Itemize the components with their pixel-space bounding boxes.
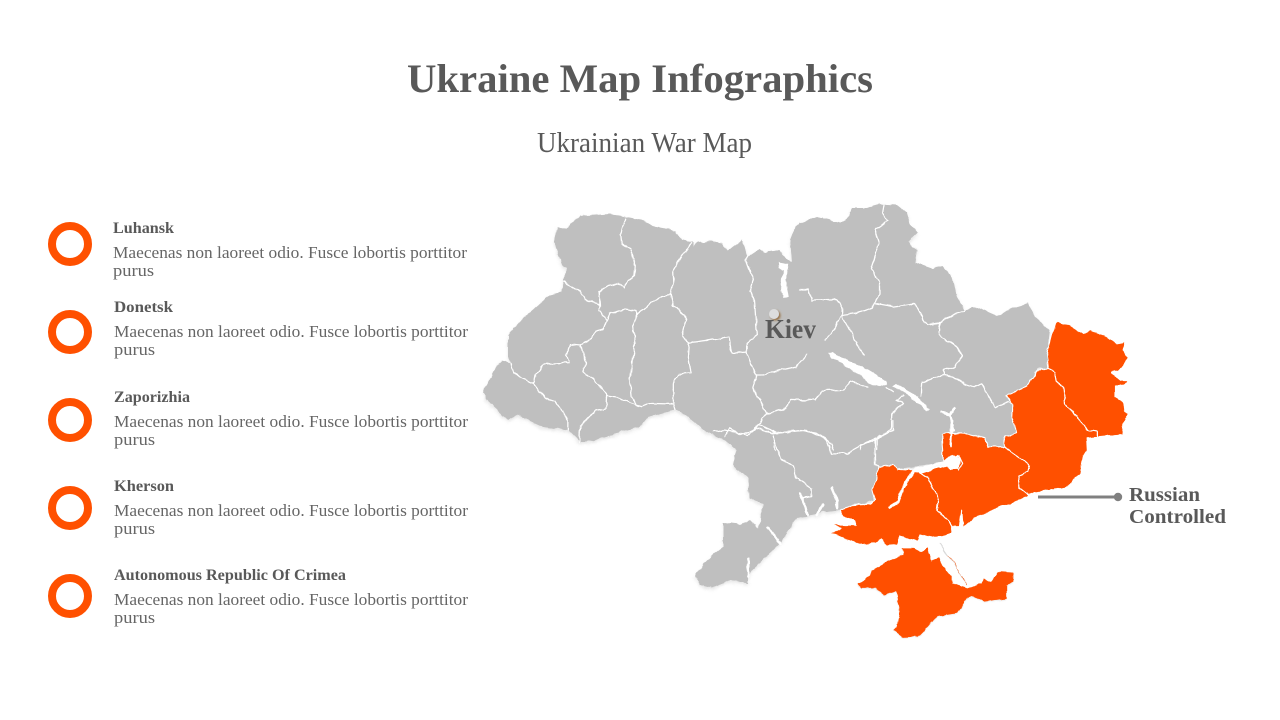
list item: Luhansk: Maecenas non laoreet odio. Fusce lobortis porttitor bbox=[113, 243, 468, 262]
list item: Kherson bbox=[52, 478, 469, 538]
map: land shapes with rough coastline bbox=[483, 204, 1128, 637]
callout: Russian Controlled: Russian bbox=[1129, 484, 1201, 506]
map of Ukraine bbox=[483, 204, 1128, 637]
list item: Autonomous Republic Of Crimea: Autonomous Republic Of Crimea bbox=[114, 567, 346, 584]
region: Kherson bbox=[830, 465, 953, 546]
list item: Kherson: purus bbox=[114, 519, 155, 538]
callout: Russian Controlled: Controlled bbox=[1129, 506, 1227, 528]
list panel: regions bbox=[52, 220, 469, 627]
region: Donetsk bbox=[1004, 368, 1097, 495]
list item: Luhansk bbox=[52, 220, 468, 280]
list item: Autonomous Republic Of Crimea: purus bbox=[114, 608, 155, 627]
map: free territory in grey bbox=[483, 204, 1050, 588]
callout: Russian Controlled bbox=[1038, 484, 1227, 528]
list item: Donetsk: Maecenas non laoreet odio. Fusce lobortis porttitor bbox=[114, 322, 469, 341]
list item: Donetsk: Donetsk bbox=[114, 299, 173, 316]
region: Zaporizhia bbox=[920, 433, 1035, 527]
marker and label: Kiev: Kiev bbox=[765, 314, 816, 344]
list item: Donetsk bbox=[52, 299, 469, 359]
map: oblast borders and reservoirs, centre and east bbox=[800, 205, 1008, 450]
title: Ukraine Map Infographics bbox=[407, 56, 873, 101]
list item: Kherson: Maecenas non laoreet odio. Fusce lobortis porttitor bbox=[114, 501, 469, 520]
list item: Kherson: Kherson bbox=[114, 478, 174, 495]
list item: Autonomous Republic Of Crimea bbox=[52, 567, 469, 627]
region: Crimea bbox=[858, 548, 1013, 637]
map: Russian-controlled regions in orange bbox=[830, 322, 1128, 637]
list item: Zaporizhia: purus bbox=[114, 430, 155, 449]
subtitle: Ukrainian War Map bbox=[537, 128, 752, 159]
list item: Donetsk: purus bbox=[114, 340, 155, 359]
map: oblast borders, west bbox=[512, 218, 810, 450]
list item: Zaporizhia: Zaporizhia bbox=[114, 389, 190, 406]
map: rivers and coast details bbox=[713, 420, 967, 585]
list item: Luhansk: purus bbox=[113, 261, 154, 280]
list item: Autonomous Republic Of Crimea: Maecenas non laoreet odio. Fusce lobortis porttitor bbox=[114, 590, 469, 609]
list item: Zaporizhia: Maecenas non laoreet odio. Fusce lobortis porttitor bbox=[114, 412, 469, 431]
list item: Luhansk: Luhansk bbox=[113, 220, 174, 237]
region: Luhansk bbox=[1047, 322, 1128, 437]
list item: Zaporizhia bbox=[52, 389, 469, 449]
